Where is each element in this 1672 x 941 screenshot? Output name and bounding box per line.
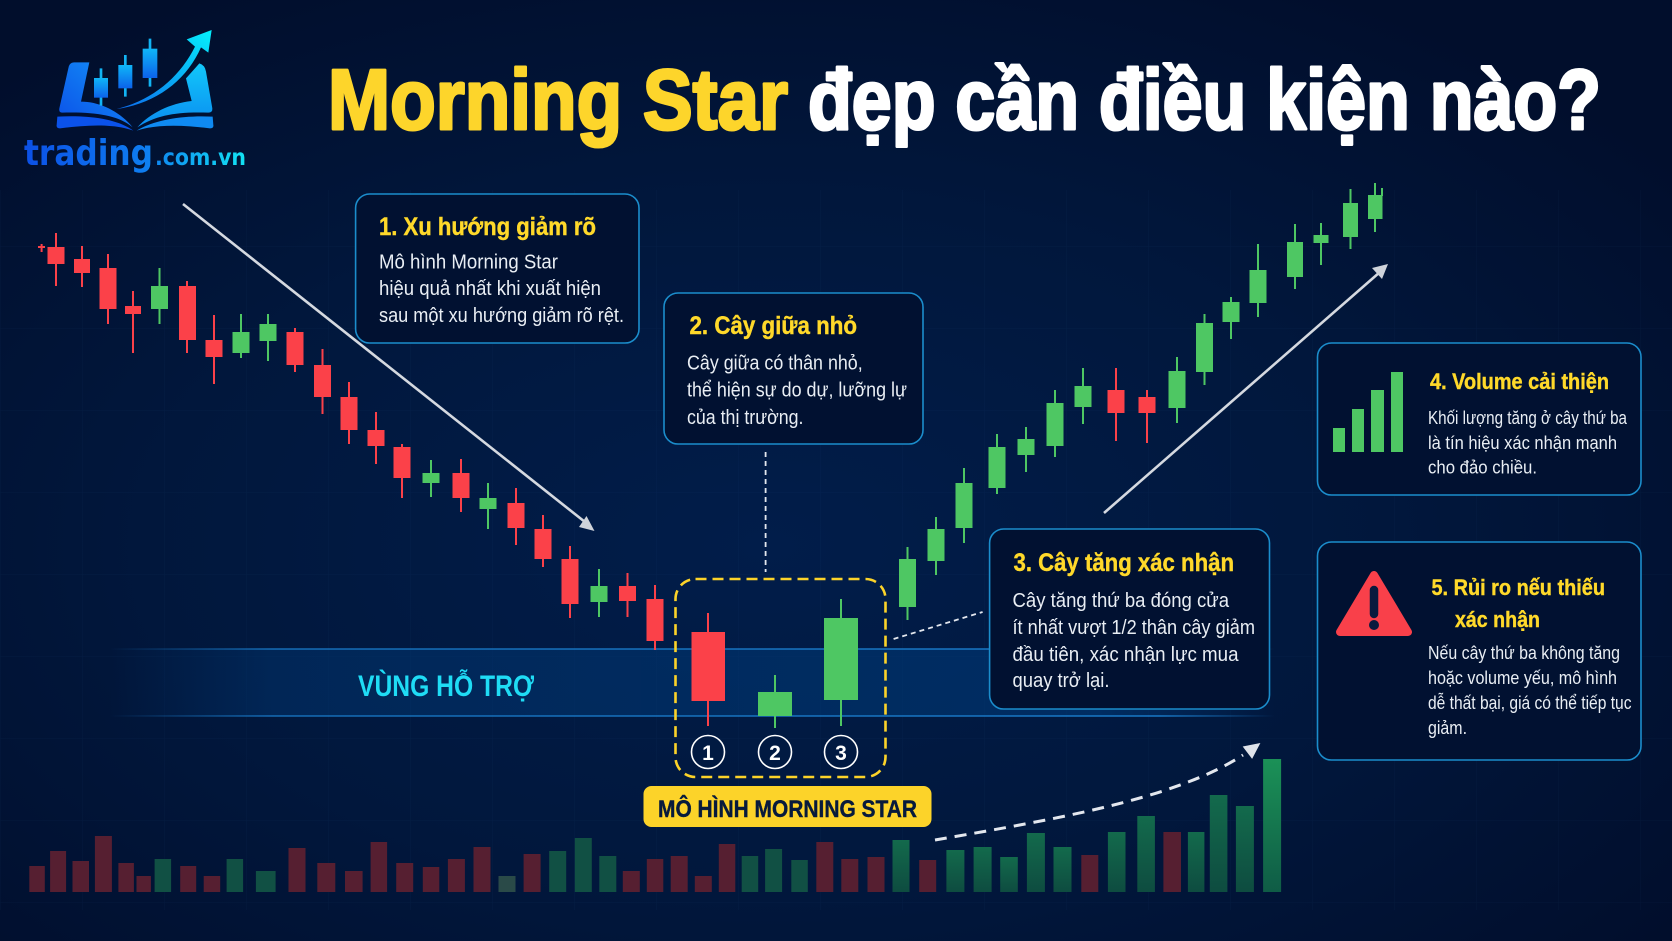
pattern label: MÔ HÌNH MORNING STAR: MÔ HÌNH MORNING STAR [658, 795, 917, 823]
logo wordmark: trading [24, 133, 153, 174]
panel 1 body: Mô hình Morning Star [379, 252, 558, 274]
panel 1 heading: 1. Xu hướng giảm rõ [379, 213, 596, 241]
icon: rising volume bars [1333, 372, 1403, 452]
support zone label: VÙNG HỖ TRỢ [358, 669, 534, 703]
panel 2 heading: 2. Cây giữa nhỏ [690, 312, 857, 340]
panel 3 heading: 3. Cây tăng xác nhận [1014, 549, 1234, 577]
panel 2 body: Cây giữa có thân nhỏ, [687, 352, 863, 374]
panel 5 heading: xác nhận [1455, 607, 1540, 632]
panel 3: Cây tăng xác nhận [990, 529, 1270, 709]
panel 3 body: quay trở lại. [1012, 670, 1110, 692]
support zone band [110, 648, 1275, 717]
panel 5 body [1428, 643, 1632, 738]
dashed highlight box [676, 579, 886, 777]
number badges: 1 [702, 742, 714, 765]
volume bars [29, 759, 1281, 892]
panel 1: Xu hướng giảm rõ [356, 194, 639, 343]
title [328, 53, 1601, 148]
title: Morning Star [328, 53, 788, 148]
panel 5 body: giảm. [1428, 718, 1467, 738]
candlestick chart: downtrend [38, 233, 664, 650]
arrow: volume rising dashed curve [935, 744, 1259, 840]
morning star pattern [676, 579, 886, 777]
panel 3 body: ít nhất vượt 1/2 thân cây giảm [1012, 617, 1255, 639]
arrow: downtrend [183, 204, 594, 531]
arrow: uptrend [1104, 264, 1388, 513]
panel 1 body [379, 252, 624, 327]
panel 5: Rủi ro nếu thiếu xác nhận [1318, 542, 1641, 760]
panel 5 body: Nếu cây thứ ba không tăng [1428, 643, 1620, 663]
panel 4 heading: 4. Volume cải thiện [1430, 369, 1609, 394]
candlestick chart: uptrend [899, 183, 1382, 620]
logo: trading.com.vn [24, 30, 246, 174]
pattern label: MÔ HÌNH MORNING STAR [644, 786, 932, 827]
panel 2 body [687, 352, 907, 429]
panel 2: Cây giữa nhỏ [664, 293, 923, 444]
panel 5 heading [1432, 575, 1605, 632]
panel 4 body: là tín hiệu xác nhận mạnh [1428, 433, 1617, 453]
icon: warning triangle [1340, 575, 1408, 632]
panel 3 body [1012, 590, 1255, 692]
icon: book with candles and rising arrow [57, 30, 213, 131]
logo wordmark: .com.vn [155, 145, 246, 171]
candle 2 [758, 675, 792, 728]
panel 3 body: đầu tiên, xác nhận lực mua [1012, 644, 1239, 666]
panel 3 body: Cây tăng thứ ba đóng cửa [1012, 590, 1230, 612]
panel 2 body: thể hiện sự do dự, lưỡng lự [687, 380, 907, 402]
number badges [692, 736, 858, 768]
connector: panel 3 to pattern [894, 612, 983, 639]
panel 4: Volume cải thiện [1318, 343, 1641, 495]
panel 4 body: cho đảo chiều. [1428, 458, 1537, 478]
candle 1 [692, 613, 725, 726]
panel 5 body: hoặc volume yếu, mô hình [1428, 668, 1617, 688]
logo wordmark [24, 133, 246, 174]
panel 4 body: Khối lượng tăng ở cây thứ ba [1428, 408, 1628, 428]
panel 5 body: dễ thất bại, giá có thể tiếp tục [1428, 692, 1632, 713]
connector: panel 2 to pattern [765, 452, 767, 572]
panel 1 body: sau một xu hướng giảm rõ rệt. [379, 305, 624, 327]
panel 5 heading: 5. Rủi ro nếu thiếu [1432, 575, 1605, 600]
panel 1 body: hiệu quả nhất khi xuất hiện [379, 278, 601, 300]
number badges: 3 [835, 742, 847, 765]
candle 3 [824, 599, 858, 726]
number badges: 2 [769, 742, 781, 765]
panel 4 body [1428, 408, 1628, 478]
panel 2 body: của thị trường. [687, 407, 804, 429]
